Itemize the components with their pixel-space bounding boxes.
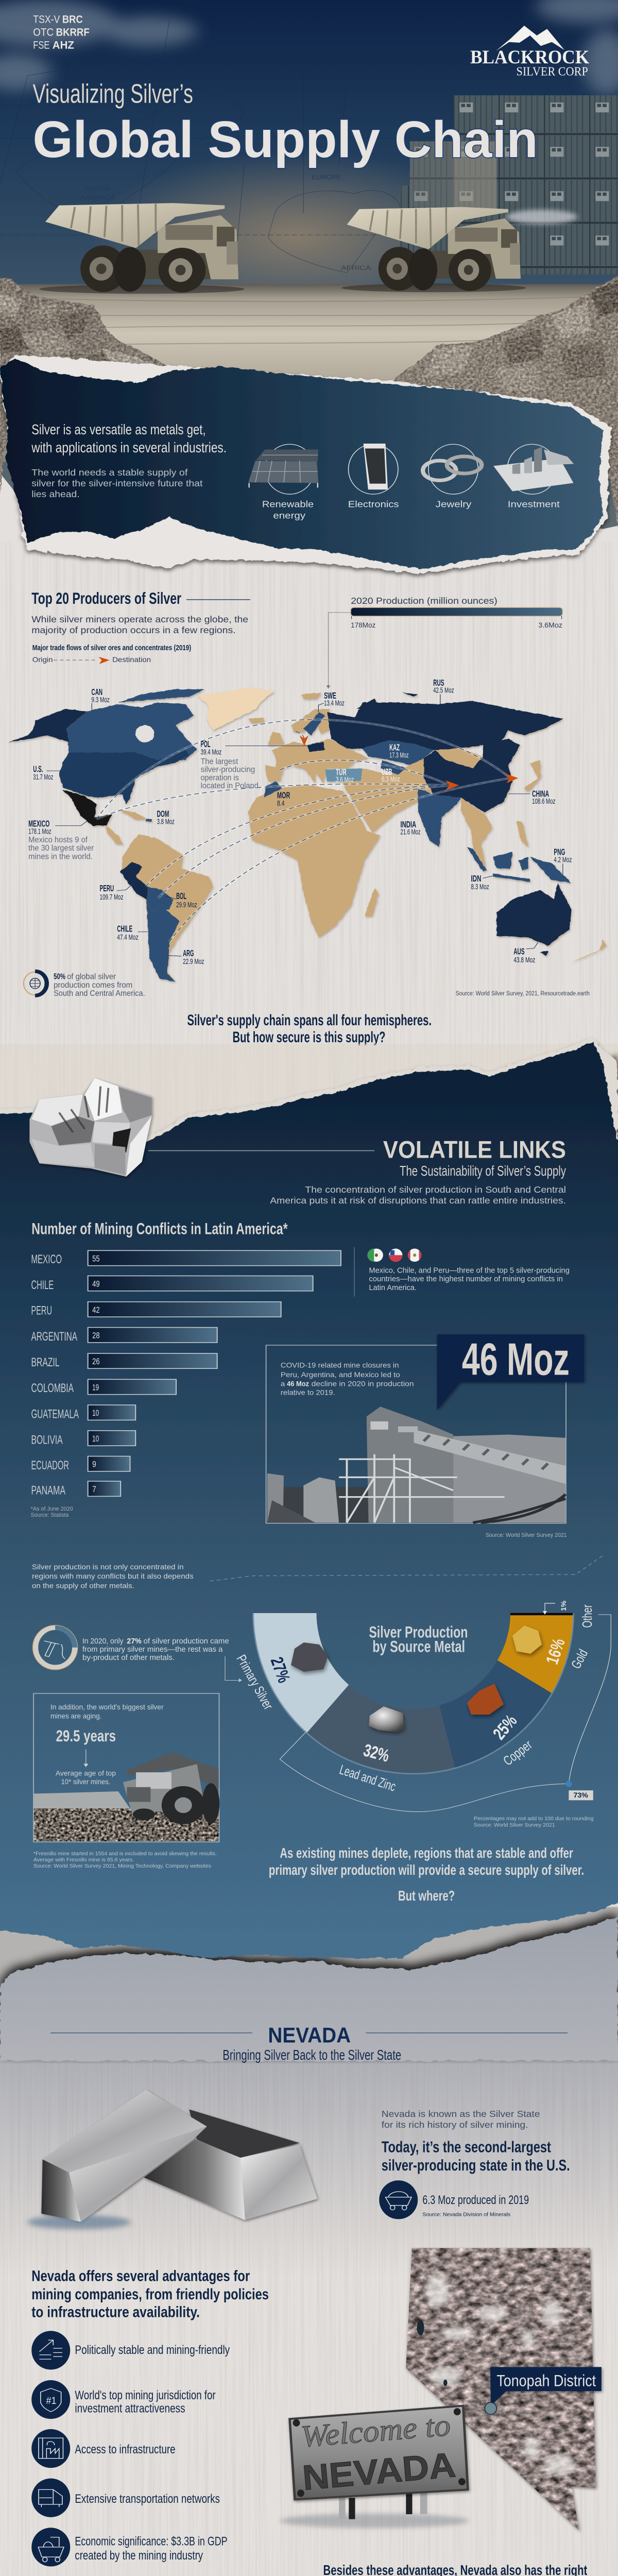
segment percentages: 1% xyxy=(559,1600,568,1611)
Poland note: located in Poland. xyxy=(201,781,261,790)
title xyxy=(33,79,538,168)
stat: 50 percent text: South and Central America. xyxy=(54,989,145,998)
country labels: 3.8 Moz xyxy=(157,818,175,826)
segment names: Gold xyxy=(568,1647,591,1671)
panel: aging mines xyxy=(33,1693,219,1842)
aging mines footnote xyxy=(33,1851,217,1869)
bar chart: mining conflicts: 28 xyxy=(92,1330,100,1340)
stat: 50 percent text: 50% xyxy=(54,972,65,981)
country labels: RUS xyxy=(433,679,444,688)
Silver State heading xyxy=(382,2138,570,2174)
country labels: KAZ xyxy=(389,743,400,753)
icon labels: Electronics xyxy=(348,499,399,510)
country labels: 109.7 Moz xyxy=(100,893,124,902)
27 percent text: from primary silver mines—the rest was a xyxy=(82,1645,222,1654)
flags callout: countries—have the highest number of mining conflicts in xyxy=(369,1275,563,1283)
aging mines footnote: Source: World Silver Survey 2021, Mining Technology, Company websites xyxy=(33,1863,212,1869)
icon: economic significance xyxy=(31,2528,70,2567)
advantages heading xyxy=(31,2267,269,2320)
source metal section xyxy=(32,1555,611,2063)
dump truck right xyxy=(341,207,526,292)
map intro text xyxy=(31,615,248,635)
stock tickers: TSX-V xyxy=(33,13,60,26)
6.3 Moz stat: 6.3 Moz produced in 2019 xyxy=(422,2193,529,2207)
flags callout: Mexico, Chile, and Peru—three of the top 5 silver-producing xyxy=(369,1266,570,1275)
section rule xyxy=(148,1150,374,1151)
destination arrows xyxy=(300,735,518,790)
sign lettering xyxy=(300,2408,457,2498)
arrow to other segment xyxy=(543,1603,555,1615)
6.3 Moz stat xyxy=(422,2193,529,2217)
section heading: VOLATILE LINKS xyxy=(383,1137,566,1163)
COVID text: Peru, Argentina, and Mexico led to xyxy=(281,1371,400,1379)
haul truck photo xyxy=(34,1752,219,1841)
trade flow arcs xyxy=(97,720,510,942)
world map xyxy=(8,688,607,982)
Poland note: silver-producing xyxy=(201,765,255,774)
icon: jewelry xyxy=(423,444,482,494)
aging mines text: 10* silver mines. xyxy=(61,1778,110,1786)
section intro: The concentration of silver production in South and Central xyxy=(305,1185,566,1195)
country labels: CAN xyxy=(92,687,102,697)
chart title: by Source Metal xyxy=(372,1638,465,1656)
country labels: 8.4 xyxy=(277,799,285,807)
ore: gold xyxy=(512,1625,542,1654)
logo: Blackrock Silver Corp: SILVER CORP xyxy=(517,64,588,78)
segment percentages: 16% xyxy=(542,1636,569,1667)
icon: politically stable xyxy=(31,2331,70,2369)
segment percentages: 25% xyxy=(489,1711,521,1743)
bar chart: mining conflicts: 9 xyxy=(92,1459,96,1469)
stock tickers: BRC xyxy=(62,13,83,26)
label: map text xyxy=(80,174,371,272)
icon: investment xyxy=(493,444,574,494)
country labels: MOR xyxy=(277,791,290,801)
sign lettering: Welcome to xyxy=(300,2408,452,2453)
conclusion text: But where? xyxy=(398,1887,455,1904)
trade flow legend: Destination xyxy=(112,656,151,664)
title: Visualizing Silver’s xyxy=(33,79,193,109)
Mexico note: the 30 largest silver xyxy=(28,844,94,853)
bar chart: mining conflicts: MEXICO xyxy=(31,1252,62,1266)
Tonopah marker xyxy=(490,2367,602,2406)
ore: copper xyxy=(467,1684,504,1715)
bar chart: mining conflicts: BRAZIL xyxy=(31,1355,60,1369)
header scene xyxy=(0,0,618,529)
panel: volatile links navy sheet xyxy=(0,1042,618,1958)
icon: top jurisdiction: #1 xyxy=(46,2396,56,2406)
country labels: 43.8 Moz xyxy=(513,956,535,964)
advantage: economic significance xyxy=(75,2534,228,2563)
flags callout: Latin America. xyxy=(369,1283,417,1292)
map heading: Top 20 Producers of Silver xyxy=(31,589,181,607)
icon: renewable energy xyxy=(248,444,318,494)
country labels: 108.6 Moz xyxy=(532,797,555,806)
steam xyxy=(506,210,577,224)
panel: silver uses xyxy=(0,355,611,573)
advantage: economic significance: Economic significance: $3.3B in GDP xyxy=(75,2534,228,2548)
ore: lead and zinc xyxy=(369,1706,404,1732)
ground xyxy=(0,284,618,462)
segment percentages: 32% xyxy=(362,1740,391,1766)
segment names: Lead and Zinc xyxy=(338,1761,398,1794)
bar chart: mining conflicts: ARGENTINA xyxy=(31,1329,77,1343)
segment percentages xyxy=(267,1600,569,1766)
advantage: stable: Politically stable and mining-friendly xyxy=(75,2343,230,2357)
COVID text xyxy=(281,1362,414,1397)
icon: infrastructure xyxy=(31,2429,70,2468)
ore: primary silver xyxy=(291,1642,328,1672)
country labels: CHILE xyxy=(117,924,132,934)
27 percent text: of silver production came xyxy=(144,1637,229,1646)
COVID text: relative to 2019. xyxy=(281,1389,335,1397)
Poland note: operation is xyxy=(201,773,239,782)
Nevada section xyxy=(28,2090,602,2576)
dashed link xyxy=(210,1555,603,1581)
section intro: America puts it at risk of disruptions that can rattle entire industries. xyxy=(270,1196,566,1206)
bar chart: mining conflicts: COLOMBIA xyxy=(31,1381,74,1395)
country labels: U.S. xyxy=(33,765,43,774)
COVID text: a xyxy=(281,1380,285,1388)
chart footnote xyxy=(31,1505,73,1518)
chart footnote: Source: Statista xyxy=(31,1512,68,1518)
advantage: infrastructure: Access to infrastructure xyxy=(75,2442,176,2456)
bar chart: mining conflicts xyxy=(31,1250,341,1497)
stock tickers: FSE xyxy=(33,39,49,52)
dump truck left xyxy=(40,203,244,294)
trade flow legend: Major trade flows of silver ores and concentrates (2019) xyxy=(32,643,191,652)
aging mines footnote: Average with Fresnillo mine is 65.6 years. xyxy=(33,1857,134,1863)
stock tickers: BKRRF xyxy=(56,26,90,39)
lower shadowed paper edge xyxy=(0,1907,618,2061)
country labels: 8.3 Moz xyxy=(471,883,489,891)
73 percent bracket: 73% xyxy=(574,1791,588,1800)
27 percent text: 27% xyxy=(127,1637,142,1646)
mill building photo xyxy=(267,1406,565,1522)
segment names xyxy=(234,1604,595,1794)
chart note: Percentages may not add to 100 due to rounding xyxy=(474,1816,594,1822)
label: map text: EUROPE xyxy=(312,174,341,181)
segment names: Other xyxy=(579,1604,595,1628)
Nevada heading: Bringing Silver Back to the Silver State xyxy=(222,2047,401,2063)
country labels: TUR xyxy=(336,768,347,777)
panel: volatile links background: But how secure is this supply? xyxy=(233,1029,385,1045)
logo: Blackrock Silver Corp: BLACKROCK xyxy=(470,46,589,67)
by-product intro: Silver production is not only concentrated in xyxy=(32,1563,184,1571)
Welcome to Nevada sign xyxy=(280,2406,469,2528)
stat: 50 percent text xyxy=(54,972,145,998)
country labels: 22.9 Moz xyxy=(183,958,204,966)
Silver State text: Nevada is known as the Silver State xyxy=(382,2110,540,2120)
segment percentages: 27% xyxy=(267,1654,294,1685)
country labels: POL xyxy=(201,740,211,750)
advantage: jurisdiction xyxy=(75,2388,216,2415)
Silver State text xyxy=(382,2110,540,2130)
icon: transportation xyxy=(31,2479,70,2517)
stock tickers: AHZ xyxy=(53,39,74,52)
27 percent text: by-product of other metals. xyxy=(82,1653,175,1662)
country labels: 3.6 Moz xyxy=(336,775,354,784)
production colour scale xyxy=(327,596,562,689)
trade flow legend: Origin xyxy=(32,656,53,664)
label: map text: AFRICA xyxy=(341,264,371,272)
bar chart: mining conflicts: BOLIVIA xyxy=(31,1433,63,1447)
country labels: BOL xyxy=(176,891,186,901)
callout: 46 Moz xyxy=(437,1334,584,1410)
rock pile right xyxy=(388,276,618,529)
Silver State text: for its rich history of silver mining. xyxy=(382,2121,528,2130)
chart note xyxy=(474,1816,594,1828)
advantages heading: to infrastructure availability. xyxy=(31,2303,200,2320)
intro body xyxy=(31,467,203,499)
bar chart: mining conflicts: 26 xyxy=(92,1357,100,1366)
sign lettering: NEVADA xyxy=(301,2445,457,2498)
arrow to primary silver xyxy=(225,1656,242,1682)
advantages heading: mining companies, from friendly policies xyxy=(31,2286,269,2302)
icon labels: Renewable xyxy=(262,499,314,510)
country labels: 29.9 Moz xyxy=(176,901,197,909)
country labels: 21.6 Moz xyxy=(401,828,421,836)
country labels: 9.3 Moz xyxy=(92,696,110,704)
Mexico note: Mexico hosts 9 of xyxy=(28,836,88,844)
bar chart: mining conflicts: 10 xyxy=(92,1408,99,1418)
Nevada satellite map xyxy=(406,2248,596,2531)
country labels: 31.7 Moz xyxy=(33,773,53,781)
label: map text: NORTH xyxy=(85,185,110,193)
icon: mine cart xyxy=(379,2180,418,2219)
icon: top jurisdiction xyxy=(31,2380,70,2419)
Tonopah point xyxy=(485,2402,496,2414)
aging mines text: In addition, the world's biggest silver xyxy=(50,1703,164,1711)
country labels xyxy=(28,679,572,966)
bar chart: mining conflicts: 7 xyxy=(92,1484,96,1494)
map intro text: While silver miners operate across the globe, the xyxy=(31,615,248,624)
country labels: 6.3 Moz xyxy=(382,775,400,784)
icon labels: Investment xyxy=(508,499,560,510)
stat: 50 percent text: of global silver xyxy=(67,972,116,981)
COVID text: COVID-19 related mine closures in xyxy=(281,1362,399,1369)
intro heading xyxy=(31,421,227,456)
section intro xyxy=(270,1185,566,1206)
country labels: DOM xyxy=(157,809,169,819)
COVID text: 46 Moz xyxy=(287,1380,309,1388)
leader lines xyxy=(46,694,563,956)
silver nugget xyxy=(29,1078,152,1177)
production colour scale: 2020 Production (million ounces) xyxy=(351,596,497,606)
country labels: ARG xyxy=(183,948,194,958)
COVID source: Source: World Silver Survey 2021 xyxy=(486,1532,567,1538)
6.3 Moz stat: Source: Nevada Division of Minerals xyxy=(422,2212,510,2217)
bar chart: mining conflicts: CHILE xyxy=(31,1278,54,1292)
Poland note: The largest xyxy=(201,757,238,766)
bar chart: mining conflicts: 49 xyxy=(92,1279,100,1289)
bar chart: mining conflicts: 19 xyxy=(92,1382,99,1392)
icon labels xyxy=(262,499,560,521)
semicircle chart: silver by source metal xyxy=(234,1600,595,1794)
stock tickers xyxy=(33,13,90,52)
73 percent bracket xyxy=(280,1615,611,1812)
country labels: IDN xyxy=(471,874,481,884)
advantage: economic significance: created by the mining industry xyxy=(75,2548,203,2563)
logo: Blackrock Silver Corp xyxy=(470,26,589,78)
country labels: AUS xyxy=(513,947,525,957)
chart title: Silver Production xyxy=(369,1623,468,1641)
advantage: transportation: Extensive transportation networks xyxy=(75,2492,220,2505)
intro body: The world needs a stable supply of xyxy=(31,467,188,478)
chart title xyxy=(369,1623,468,1656)
country labels: INDIA xyxy=(401,820,416,829)
by-product intro: on the supply of other metals. xyxy=(32,1582,134,1590)
map section xyxy=(8,589,607,1028)
COVID text: decline in 2020 in production xyxy=(312,1380,414,1388)
conclusion text xyxy=(269,1845,584,1904)
country labels: 4.2 Moz xyxy=(554,856,572,864)
intro heading: Silver is as versatile as metals get, xyxy=(31,421,205,437)
silver bars xyxy=(28,2090,317,2228)
bar chart: mining conflicts: GUATEMALA xyxy=(31,1407,79,1421)
production colour scale: 3.6Moz xyxy=(538,622,562,630)
segment names: Copper xyxy=(500,1737,535,1769)
Nevada heading xyxy=(50,2023,568,2063)
section heading xyxy=(383,1137,566,1179)
country labels: PERU xyxy=(100,884,114,894)
aging mines text: 29.5 years xyxy=(56,1727,116,1745)
Nevada heading: NEVADA xyxy=(268,2023,351,2047)
Mexico note xyxy=(28,836,94,861)
bar chart: mining conflicts: PANAMA xyxy=(31,1483,65,1497)
chart note: Source: World Silver Survey 2021 xyxy=(474,1822,555,1828)
country labels: UZB xyxy=(382,767,392,777)
bar chart: mining conflicts: 55 xyxy=(92,1253,100,1263)
country labels: PNG xyxy=(554,848,565,857)
aging mines footnote: *Fresnillo mine started in 1554 and is excluded to avoid skewing the results. xyxy=(33,1851,217,1856)
intro heading: with applications in several industries. xyxy=(31,439,227,456)
country labels: MEXICO xyxy=(28,819,49,829)
country labels: 13.4 Moz xyxy=(324,699,345,707)
by-product intro xyxy=(32,1563,194,1590)
country labels: 17.3 Moz xyxy=(389,751,409,759)
label: map text: AMERICA xyxy=(80,194,115,201)
map intro text: majority of production occurs in a few regions. xyxy=(31,625,236,635)
segment names: Primary Silver xyxy=(234,1652,277,1713)
trade flow legend xyxy=(32,643,191,664)
advantage: jurisdiction: World's top mining jurisdiction for xyxy=(75,2388,216,2402)
grey fade background of Nevada section xyxy=(0,1947,618,2277)
conflicts chart heading: Number of Mining Conflicts in Latin America* xyxy=(31,1219,288,1238)
stock tickers: OTC xyxy=(33,26,54,39)
production colour scale: 178Moz xyxy=(351,622,375,630)
country labels: SWE xyxy=(324,691,336,701)
icon: 27 percent donut xyxy=(33,1625,78,1670)
aging mines text xyxy=(50,1703,164,1786)
aging mines text: mines are aging. xyxy=(50,1713,101,1720)
stat: 50 percent icon xyxy=(24,971,47,995)
chart footnote: *As of June 2020 xyxy=(31,1505,73,1512)
country labels: CHINA xyxy=(532,789,549,799)
rock pile left xyxy=(0,278,171,493)
flags callout xyxy=(354,1247,570,1297)
stat: 50 percent text: production comes from xyxy=(54,981,132,990)
transition question line 1: Silver's supply chain spans all four hemispheres. xyxy=(187,1012,432,1028)
country labels: 178.1 Moz xyxy=(28,827,51,836)
advantage: jurisdiction: investment attractiveness xyxy=(75,2401,185,2415)
icon labels: energy xyxy=(273,511,305,521)
bar chart: mining conflicts: PERU xyxy=(31,1303,52,1317)
Poland note xyxy=(201,757,261,790)
bar chart: mining conflicts: ECUADOR xyxy=(31,1458,69,1472)
bar chart: mining conflicts: 42 xyxy=(92,1304,100,1314)
27 percent text: In 2020, only xyxy=(82,1637,124,1646)
paper wood grain xyxy=(0,541,618,2576)
bar chart: mining conflicts: 10 xyxy=(92,1433,99,1443)
intro body: lies ahead. xyxy=(31,489,80,499)
Mexico note: mines in the world. xyxy=(28,852,93,861)
advantages heading: Nevada offers several advantages for xyxy=(31,2267,250,2284)
COVID closures panel xyxy=(266,1334,584,1523)
down arrow xyxy=(83,1749,88,1767)
icon labels: Jewelry xyxy=(436,499,471,510)
27 percent text xyxy=(82,1637,229,1662)
intro body: silver for the silver-intensive future that xyxy=(31,478,203,488)
container stack xyxy=(400,95,618,275)
icon: electronics xyxy=(349,444,398,494)
aging mines text: Average age of top xyxy=(56,1770,116,1777)
by-product intro: regions with many conflicts but it also depends xyxy=(32,1572,194,1580)
country labels: 47.4 Moz xyxy=(117,933,139,942)
country labels: 42.5 Moz xyxy=(433,686,454,694)
country labels: 39.4 Moz xyxy=(201,748,221,756)
panel: volatile links background xyxy=(0,1029,618,1195)
